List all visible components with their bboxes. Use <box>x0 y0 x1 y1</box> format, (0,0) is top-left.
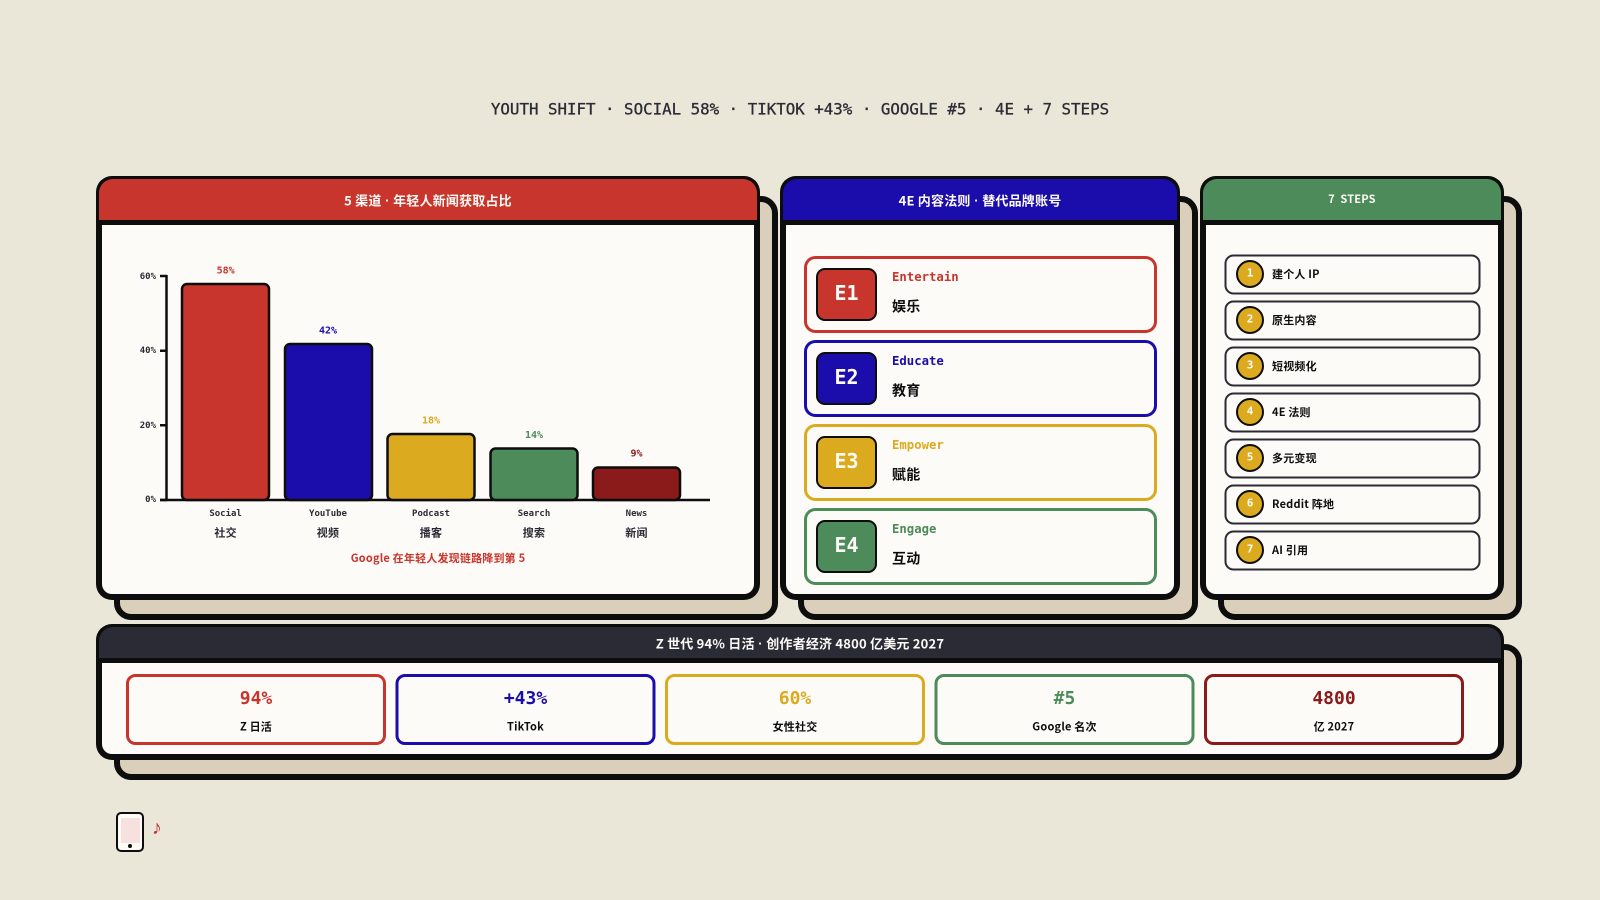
bar: Social: 58% <box>217 266 235 276</box>
bar chart: 60% <box>140 272 157 282</box>
chart footnote: Google 在年轻人发现链路降到第 5 <box>351 550 525 566</box>
bar: Search <box>490 430 578 540</box>
step 4 <box>1226 394 1480 432</box>
bar: Social <box>182 266 269 540</box>
step 3: 短视频化 <box>1272 358 1317 374</box>
bar: YouTube <box>285 326 372 540</box>
stat: 94% <box>128 676 384 744</box>
card: E4: E4 <box>834 533 859 557</box>
bar: Search: 14% <box>525 430 543 441</box>
step 6: 6 <box>1247 496 1254 510</box>
bar chart: 40% <box>140 346 157 356</box>
step 7: 7 <box>1247 542 1253 556</box>
bar: YouTube: 视频 <box>317 524 339 540</box>
panel: key stats <box>96 624 1519 777</box>
step 5: 多元变现 <box>1272 450 1317 466</box>
step 5: 5 <box>1247 450 1253 464</box>
card: E4 <box>806 510 1156 584</box>
heading: 7 steps: 7 STEPS <box>1328 191 1376 207</box>
title: YOUTH SHIFT · SOCIAL 58% · TIKTOK +43% · GOOGLE #5 · 4E + 7 STEPS <box>491 100 1109 118</box>
bar: News: 新闻 <box>625 524 648 540</box>
card: E2: Educate <box>892 354 944 368</box>
bar: Podcast: 播客 <box>420 524 442 540</box>
stat: 60% <box>666 676 924 744</box>
stat: #5 <box>936 676 1193 744</box>
bar: YouTube: YouTube <box>309 509 348 519</box>
step 4: 4E 法则 <box>1272 404 1311 420</box>
step 1 <box>1226 256 1480 294</box>
card: E3: E3 <box>834 449 859 473</box>
bar: Podcast <box>388 416 474 540</box>
step 1: 建个人 IP <box>1272 266 1320 282</box>
stat: #5: #5 <box>1054 688 1075 709</box>
card: E4: Engage <box>892 522 936 536</box>
stat: 4800 <box>1206 676 1462 744</box>
card: E2 <box>806 342 1156 416</box>
bar: Podcast: Podcast <box>412 509 450 519</box>
step 3 <box>1226 348 1480 386</box>
card: E2: E2 <box>834 365 859 389</box>
panel: 7 steps <box>1200 176 1519 617</box>
step 4: 4 <box>1247 404 1254 418</box>
stat: +43%: +43% <box>504 688 547 709</box>
y axis <box>160 275 710 501</box>
card: E1: E1 <box>834 281 859 305</box>
stat: #5: Google 名次 <box>1032 718 1097 734</box>
stat: 4800: 亿 2027 <box>1314 718 1354 734</box>
bar: Search: Search <box>518 509 550 519</box>
card: E1 <box>806 258 1156 332</box>
stat: 60%: 女性社交 <box>773 718 817 734</box>
panel: 4E content rules <box>780 176 1195 617</box>
bar chart <box>140 266 710 540</box>
bar chart: 0% <box>145 495 157 505</box>
step 7: AI 引用 <box>1271 542 1308 558</box>
bar: Social: 社交 <box>214 524 237 540</box>
card: E1: Entertain <box>892 270 959 284</box>
stat: +43% <box>397 676 654 744</box>
stat: 94%: Z 日活 <box>240 718 272 734</box>
step 6: Reddit 阵地 <box>1272 496 1334 512</box>
step 5 <box>1226 440 1480 478</box>
stat: +43%: TikTok <box>507 718 544 734</box>
heading: 4E rules: 4E 内容法则 · 替代品牌账号 <box>899 190 1061 210</box>
stat: 60%: 60% <box>779 688 811 709</box>
step 2: 原生内容 <box>1272 312 1317 328</box>
bar: Search: 搜索 <box>523 524 545 540</box>
heading: stats: Z 世代 94% 日活 · 创作者经济 4800 亿美元 2027 <box>656 634 944 652</box>
step 6 <box>1226 486 1480 524</box>
bar: News <box>593 448 680 540</box>
card: E3 <box>806 426 1156 500</box>
card: E4: 互动 <box>892 548 920 568</box>
bar chart: 20% <box>140 421 157 431</box>
panel: channel share chart <box>96 176 775 617</box>
card: E1: 娱乐 <box>892 296 920 316</box>
step 7 <box>1226 532 1480 570</box>
icon: phone with music note: ♪ <box>152 817 162 839</box>
icon: phone with music note <box>117 813 162 851</box>
stat: 4800: 4800 <box>1312 688 1356 709</box>
step 3: 3 <box>1247 358 1253 372</box>
card: E3: Empower <box>892 438 944 452</box>
stat: 94%: 94% <box>240 688 272 709</box>
bar: Podcast: 18% <box>422 416 440 426</box>
step 1: 1 <box>1247 266 1254 280</box>
step 2: 2 <box>1247 312 1253 326</box>
card: E3: 赋能 <box>892 464 920 484</box>
bar: News: News <box>626 509 647 519</box>
heading: channel share: 5 渠道 · 年轻人新闻获取占比 <box>344 190 512 210</box>
step 2 <box>1226 302 1480 340</box>
bar: Social: Social <box>209 508 242 519</box>
bar: News: 9% <box>630 448 643 460</box>
bar: YouTube: 42% <box>319 326 337 336</box>
card: E2: 教育 <box>892 380 920 400</box>
